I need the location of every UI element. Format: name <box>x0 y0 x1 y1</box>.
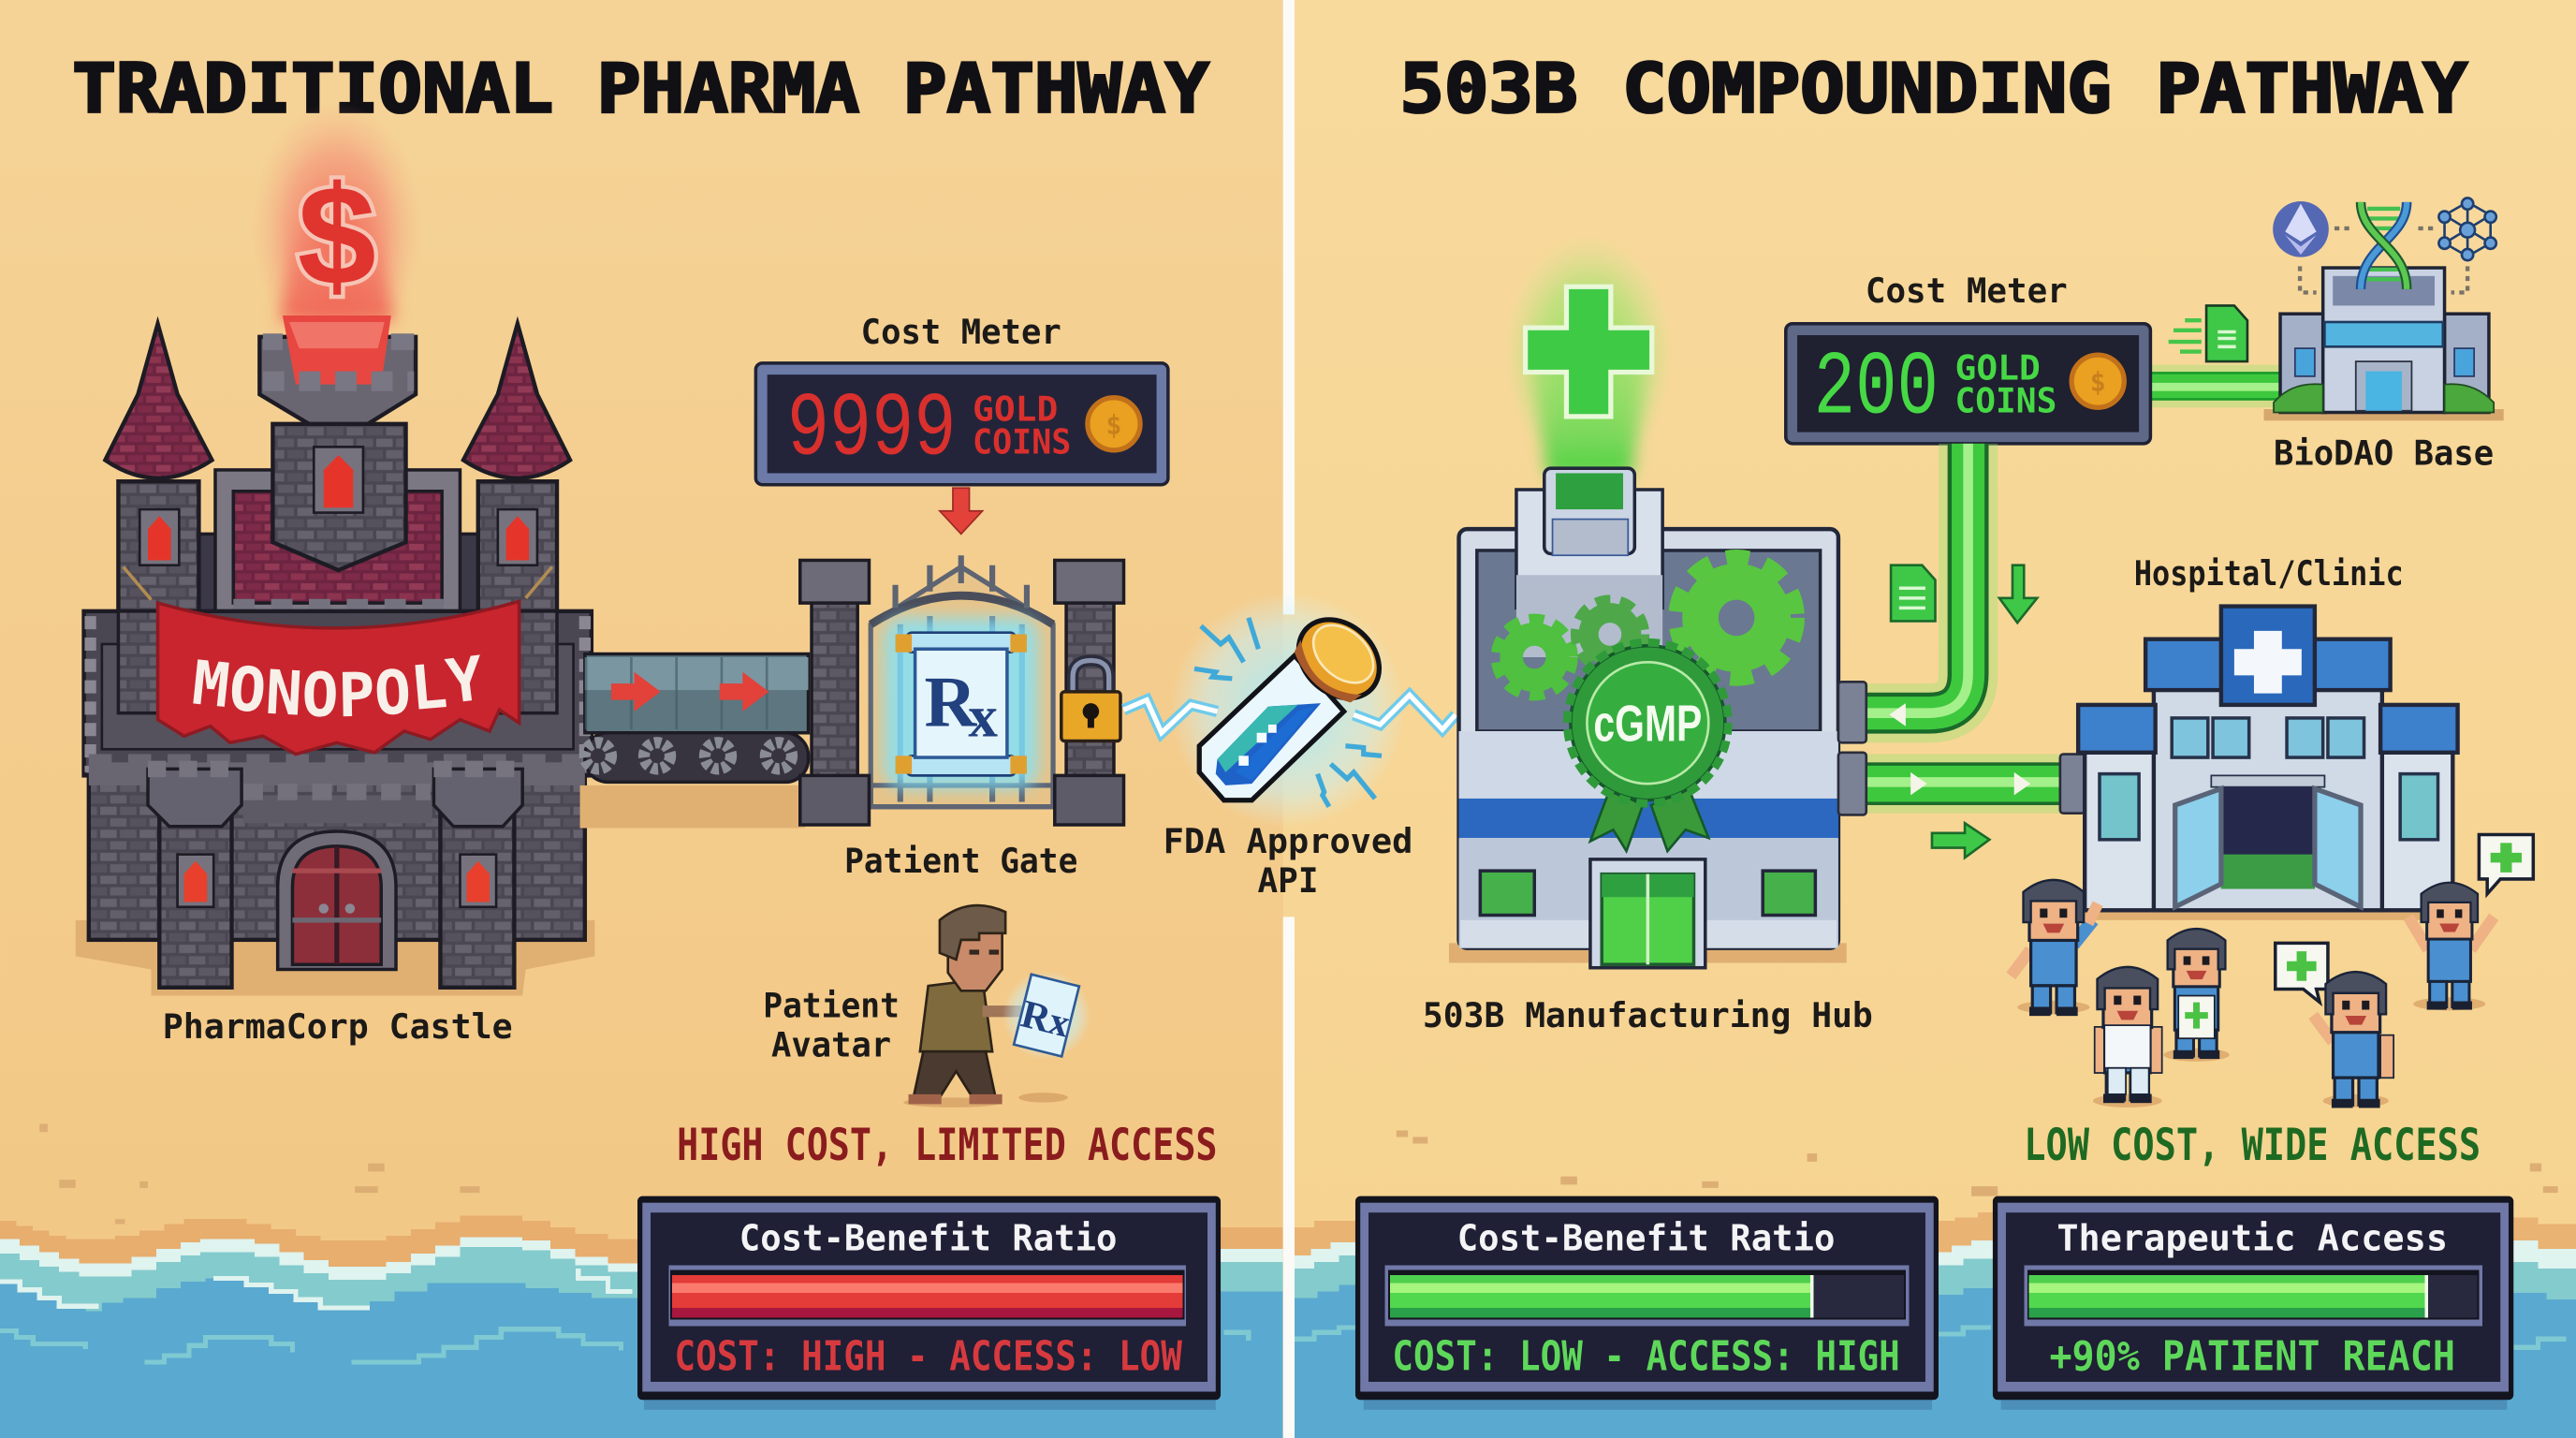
icon: hospital <box>2073 607 2465 920</box>
progress bar: red <box>668 1265 1186 1326</box>
person: cheering medic <box>2408 883 2494 1010</box>
right front tower <box>433 769 522 988</box>
right tower <box>463 324 570 714</box>
scroll: Rx <box>884 618 1038 788</box>
icon: green cross <box>1528 289 1649 414</box>
cost meter: 200 gold coins: GOLD <box>1955 347 2041 388</box>
icon: small document <box>1891 565 1935 621</box>
cost meter: 200 gold coins: COINS <box>1955 381 2056 421</box>
icon: 503B manufacturing hub <box>1449 235 1866 968</box>
cost meter: 9999 gold coins: $ <box>1106 409 1121 440</box>
label: FDA approved API: FDA Approved <box>1164 821 1412 861</box>
label: FDA approved API <box>1164 821 1412 901</box>
cost meter: 9999 gold coins: 9999 <box>787 378 956 480</box>
icon: dollar sign: $ <box>298 156 376 315</box>
seal: cGMP: cGMP <box>1593 696 1702 753</box>
label: patient avatar: Patient <box>763 985 900 1025</box>
status: COST: HIGH - ACCESS: LOW <box>674 1333 1182 1381</box>
cost meter: 200 gold coins <box>1786 324 2150 444</box>
cost meter: 9999 gold coins: GOLD <box>973 389 1058 429</box>
beach waves: right <box>1295 1212 2576 1438</box>
icon: FDA approved API vial <box>1123 592 1456 829</box>
beach waves: left <box>0 1216 1283 1438</box>
scroll: Rx: x <box>968 683 998 749</box>
person: waving medic <box>2313 972 2393 1108</box>
icon: patient avatar <box>903 905 1090 1108</box>
banner: monopoly <box>124 566 552 755</box>
status: +90% PATIENT REACH <box>2049 1333 2455 1381</box>
conveyor belt <box>580 654 809 829</box>
gears <box>1497 557 1797 695</box>
heading: Therapeutic Access <box>2056 1218 2448 1260</box>
cost meter: 9999 gold coins <box>755 363 1168 485</box>
panel: therapeutic access <box>1993 1196 2513 1410</box>
caption: high cost: HIGH COST, LIMITED ACCESS <box>677 1120 1218 1171</box>
small Rx scroll: Rx <box>1017 992 1075 1047</box>
small Rx scroll <box>1003 971 1090 1060</box>
cap and beam <box>1503 235 1674 555</box>
title: traditional pathway: TRADITIONAL PHARMA PATHWAY <box>72 49 1210 127</box>
icon: ethereum <box>2273 201 2329 257</box>
label: patient avatar: Avatar <box>771 1024 891 1064</box>
title: 503B pathway: 503B COMPOUNDING PATHWAY <box>1399 49 2468 127</box>
label: cost meter right: Cost Meter <box>1866 271 2068 311</box>
banner: monopoly: MONOPOLY <box>189 644 488 731</box>
background: right sand <box>1283 0 2576 1438</box>
label: cost meter left: Cost Meter <box>861 312 1061 352</box>
label: patient gate: Patient Gate <box>844 841 1077 881</box>
status: COST: LOW - ACCESS: HIGH <box>1392 1333 1900 1381</box>
scroll: Rx: R <box>924 662 976 742</box>
caption: low cost: LOW COST, WIDE ACCESS <box>2024 1120 2481 1171</box>
padlock <box>1061 661 1120 741</box>
panel: cost-benefit right <box>1355 1196 1939 1410</box>
label: BioDAO Base: BioDAO Base <box>2274 433 2494 474</box>
castle door <box>278 831 396 969</box>
speech bubble: plus 2 <box>2479 835 2533 894</box>
dotted links <box>2300 228 2467 292</box>
divider: lower <box>1283 917 1295 1438</box>
icon: PharmaCorp castle <box>76 102 594 996</box>
icon: DNA helix <box>2361 202 2407 289</box>
divider: upper <box>1283 0 1295 614</box>
label: Hospital/Clinic: Hospital/Clinic <box>2134 553 2404 594</box>
person: nurse with tablet <box>2163 929 2230 1062</box>
arrow: green down <box>1999 565 2037 623</box>
pipe: biodao to meter <box>2144 365 2289 407</box>
label: 503B Manufacturing Hub: 503B Manufacturing Hub <box>1423 995 1873 1035</box>
cost meter: 9999 gold coins: COINS <box>973 421 1071 462</box>
heading: Cost-Benefit Ratio <box>739 1218 1117 1260</box>
icon: BioDAO base building <box>2263 268 2504 420</box>
left front tower <box>148 769 242 988</box>
pipe: meter to hub <box>1856 444 1969 713</box>
cost meter: 200 gold coins: $ <box>2090 367 2106 398</box>
seal: cGMP <box>1567 642 1728 851</box>
progress bar: green 90 <box>2024 1265 2482 1326</box>
label: PharmaCorp Castle: PharmaCorp Castle <box>163 1006 513 1047</box>
icon: patient gate <box>800 555 1123 825</box>
pipe: hub to hospital <box>1856 703 2085 814</box>
icon: document flying <box>2169 305 2247 361</box>
arrow: meter to gate <box>940 488 983 534</box>
cost meter: 200 gold coins: 200 <box>1814 338 1939 440</box>
speech bubble: plus 1 <box>2276 943 2328 1003</box>
heading: Cost-Benefit Ratio <box>1457 1218 1835 1260</box>
person: waving nurse <box>2011 880 2098 1016</box>
progress bar: green <box>1385 1265 1909 1326</box>
left tower <box>105 324 212 714</box>
panel: cost-benefit left <box>637 1196 1221 1410</box>
arrow: green right <box>1932 823 1989 858</box>
icon: molecule network <box>2438 198 2496 260</box>
background: left sand <box>0 0 1283 1438</box>
label: patient avatar <box>763 985 900 1064</box>
central tower <box>259 315 416 570</box>
person: doctor in white <box>2093 967 2162 1108</box>
label: FDA approved API: API <box>1258 860 1318 901</box>
sand specks <box>39 1123 2558 1224</box>
